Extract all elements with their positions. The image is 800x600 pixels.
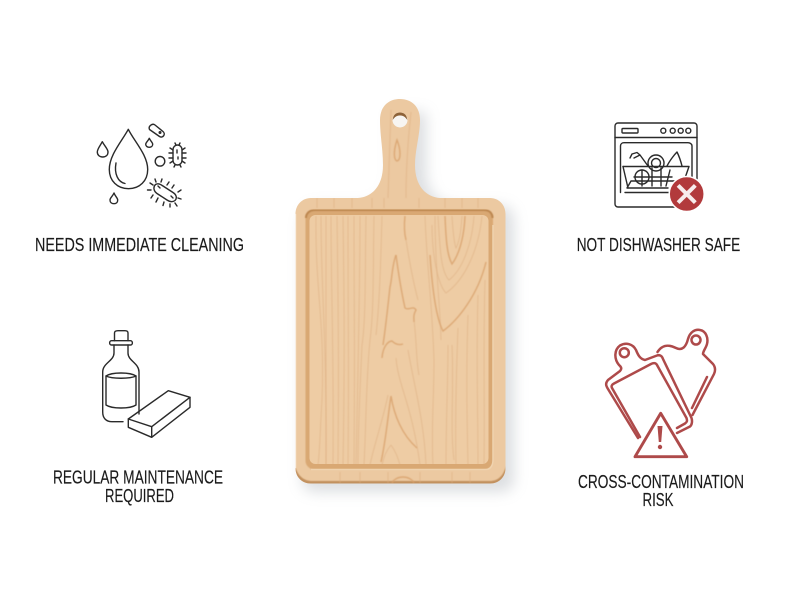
label: cross-contamination risk: RISK [642, 490, 674, 510]
label: not dishwasher safe: NOT DISHWASHER SAFE [577, 235, 740, 255]
label: regular maintenance required: REGULAR MAINTENANCE [53, 468, 223, 488]
board surface [310, 215, 488, 464]
icon: oil bottle and wax block [103, 331, 190, 437]
label: cross-contamination risk [578, 472, 744, 510]
icon: dishwasher with red cross [615, 123, 704, 212]
label: regular maintenance required [53, 468, 223, 506]
icon: two boards with warning triangle [606, 330, 715, 457]
label: cross-contamination risk: CROSS-CONTAMINATION [578, 472, 744, 492]
label: needs immediate cleaning: NEEDS IMMEDIATE CLEANING [35, 235, 244, 255]
icon: water drop and germs [97, 124, 186, 207]
groove [306, 210, 493, 470]
hanging hole [392, 112, 408, 128]
cutting board [295, 99, 514, 492]
label: regular maintenance required: REQUIRED [105, 486, 174, 506]
